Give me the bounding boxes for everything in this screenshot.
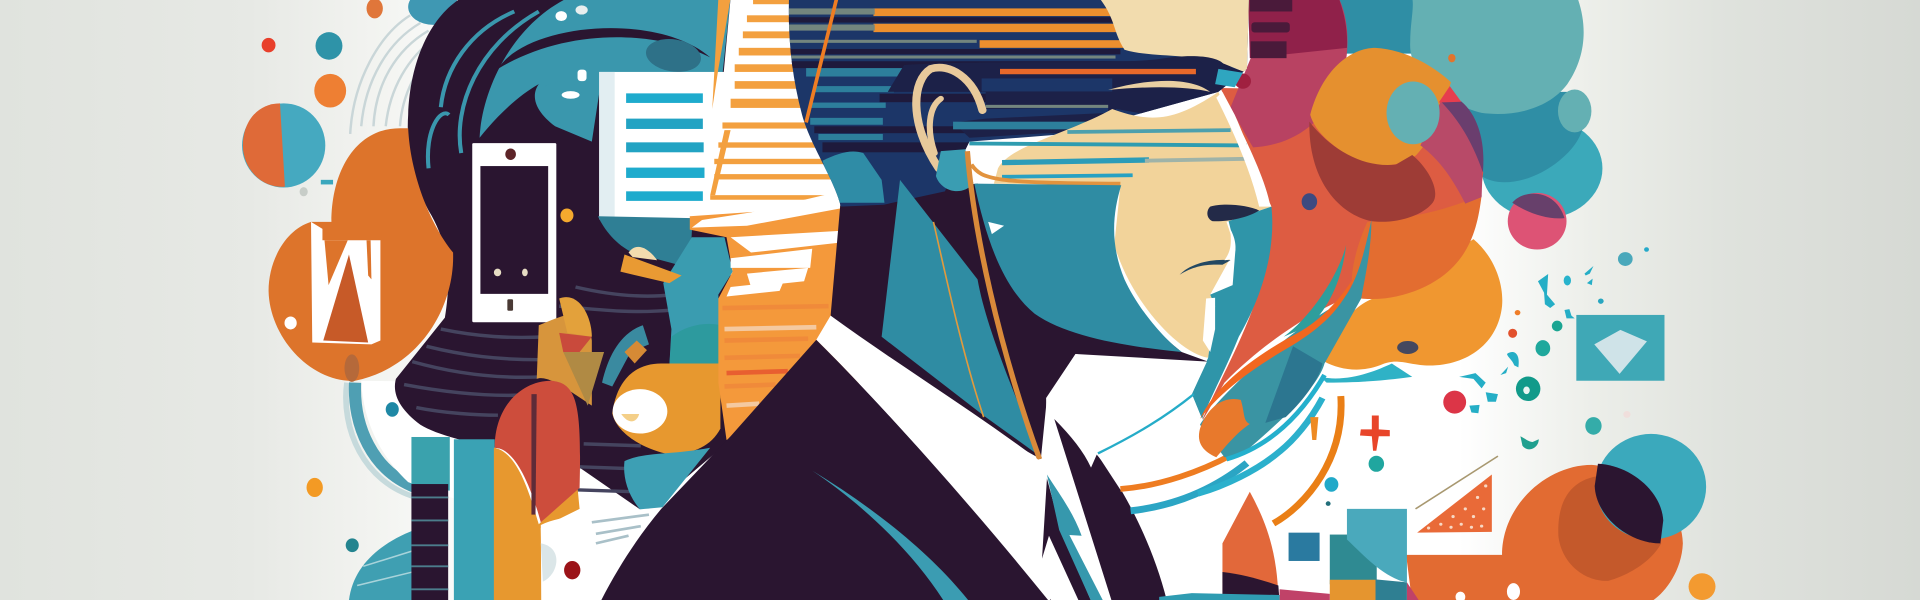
face: nose and chin gleams — [1203, 230, 1236, 352]
dot: crimson by temple — [1235, 73, 1251, 89]
blob: bright orange lower — [1324, 239, 1502, 370]
blob: orange speech with W — [269, 128, 453, 382]
face: eye — [1207, 205, 1259, 221]
head: dark mass — [395, 0, 731, 513]
blob: rose — [1420, 101, 1483, 204]
hair: dark stripes — [782, 17, 1231, 152]
splashes: teal marks — [1459, 266, 1593, 413]
line: olive diagonal — [1416, 456, 1498, 509]
blob: orange mid — [1352, 195, 1482, 299]
face: white highlight — [1216, 92, 1271, 207]
hair: teal temple stripe — [953, 122, 1086, 130]
blob: orange tab — [1199, 399, 1250, 457]
shirt: white below collar — [1098, 417, 1231, 490]
face: mouth — [1180, 260, 1231, 275]
bubble: dark teal top — [1339, 0, 1429, 54]
mark: white notch — [988, 222, 1004, 234]
phone: white device — [472, 143, 556, 322]
dot: amber corner — [1689, 573, 1716, 600]
blob: deep crimson band — [1248, 0, 1347, 58]
suit: dark jacket — [600, 340, 1051, 600]
block: orange base — [1330, 580, 1376, 600]
hair: grey stripes — [789, 8, 1116, 59]
shape: pale shadow — [541, 543, 556, 582]
overlap: purple cap — [1512, 194, 1564, 218]
tie: dark lower piece — [1042, 478, 1092, 600]
mark: orange tick — [1310, 417, 1318, 440]
line: cyan curve — [1227, 375, 1324, 459]
blob: brown red — [1309, 122, 1435, 222]
mark: red bug — [564, 561, 580, 579]
block: pink base — [1280, 589, 1330, 600]
blob: crimson top — [1231, 0, 1348, 147]
drip: orange — [367, 240, 371, 279]
suit: teal lapel sliver — [812, 471, 970, 600]
head: teal stroke arcs — [428, 11, 539, 168]
blob: amber — [1310, 48, 1451, 165]
circle: blue — [1596, 434, 1706, 540]
card: teal square with diamond — [1576, 315, 1664, 381]
flow: dark teal panel — [1265, 346, 1322, 423]
blob: darker orange inner — [1558, 476, 1661, 581]
triangle: rust — [323, 254, 368, 342]
hair: dark swoop brow — [888, 56, 1247, 138]
triangle: red — [1439, 86, 1461, 103]
block: teal bottom edge — [1159, 593, 1280, 600]
circle: pale teal eye — [1387, 82, 1440, 144]
hair: orange stripes — [873, 8, 1127, 48]
hair: teal lower tuft — [822, 152, 884, 203]
dots: white on orange — [1456, 583, 1520, 600]
block: magenta wedge — [1407, 582, 1420, 600]
block: amber column — [494, 448, 580, 600]
flow: cyan arc — [1320, 364, 1412, 383]
line: blue curve — [1131, 463, 1247, 511]
bubble: mid teal — [1461, 92, 1583, 182]
ear: cream loops — [916, 68, 982, 168]
hair: cream top right — [1101, 0, 1249, 72]
backdrop: amber lower field — [690, 205, 861, 440]
wire: thin cord — [933, 222, 984, 417]
line: orange sweep — [1273, 396, 1341, 523]
collage: teal block right — [663, 237, 733, 365]
flow: green streak — [1284, 245, 1346, 337]
hair: orange streak — [1000, 69, 1196, 74]
mark: green tick — [1520, 436, 1539, 449]
backdrop: orange bars — [710, 0, 833, 200]
tie: dark knot and blade — [1054, 419, 1167, 600]
collage: olive and orange flow — [537, 297, 649, 406]
tie: teal sliver — [1047, 474, 1104, 600]
hair: cream brow — [1108, 81, 1210, 92]
shirt: white front — [1046, 354, 1207, 600]
hair: stripe block — [782, 0, 1255, 210]
panel: right foreground shapes — [1159, 220, 1716, 600]
dot: amber near phone — [560, 209, 573, 222]
backdrop: darker orange lines — [722, 306, 829, 406]
dot: white — [284, 316, 297, 329]
letter shape: white W — [311, 222, 380, 344]
blob: red orange hair — [1200, 88, 1483, 425]
neck: teal panel — [882, 180, 1039, 455]
block: teal column — [454, 439, 495, 600]
scraps: white shirt strokes — [541, 507, 665, 600]
circle: orange and teal split — [242, 103, 325, 187]
mark: pipe joint — [344, 354, 359, 382]
blob: large orange lower — [1406, 465, 1683, 600]
line: dark drip — [531, 394, 537, 515]
stripes: dark swirl lines — [404, 287, 673, 492]
line: orange curve — [1120, 455, 1231, 489]
dots: teal and red scatter — [1324, 247, 1649, 506]
collage: cream and orange tags — [620, 247, 682, 283]
pill: red — [495, 381, 580, 522]
block: dark teal base — [1376, 579, 1407, 600]
neck: dark mass — [831, 184, 1208, 459]
ellipse: shadow teal — [643, 35, 704, 76]
bubble: light teal lower — [1482, 118, 1602, 219]
wire: earphone cord — [967, 151, 1040, 459]
collar: white — [816, 316, 1050, 600]
scraps: grey shadow — [592, 515, 649, 543]
bubble: small pale teal — [1558, 90, 1591, 132]
flow: teal fan — [1200, 220, 1371, 457]
circle: pink — [1508, 193, 1567, 249]
blob: purple edge — [1441, 101, 1483, 172]
triangle: orange dotted — [1417, 474, 1492, 533]
line: blue lower curve — [1198, 398, 1322, 494]
panel: right bubbles behind head — [1200, 0, 1602, 425]
collage: teal block upper — [598, 216, 693, 268]
head: dark arc over teal — [498, 28, 710, 69]
white blob under head — [361, 381, 494, 513]
hair: navy base — [782, 0, 1255, 210]
notch: orange gap — [324, 240, 348, 285]
backdrop: white scribbles — [692, 191, 861, 297]
bars: dark on crimson — [1250, 0, 1292, 58]
rocket: orange spire — [1222, 492, 1280, 600]
hair: navy stripe — [982, 78, 1112, 91]
hair: grey eye stripe — [986, 105, 1108, 108]
figure: businessman head and suit — [600, 0, 1272, 600]
line: orange wire across hair — [806, 0, 837, 122]
circle: amber with white moon — [612, 364, 720, 454]
shirt: cyan line collar — [1098, 394, 1194, 453]
tab: cyan temple — [1215, 69, 1243, 87]
bubble: teal top — [408, 0, 459, 25]
block: teal bar — [411, 437, 450, 491]
arc: teal pipe — [355, 383, 416, 488]
flow: orange streak — [1200, 276, 1355, 419]
square: teal light notched — [1347, 509, 1407, 582]
face: teal front shadow — [1192, 207, 1272, 419]
document: white striped panel — [599, 72, 734, 219]
panel: left collage — [242, 0, 734, 600]
leaf: teal bottom — [349, 530, 414, 600]
icon: red plus — [1360, 416, 1390, 451]
square: blue — [1289, 533, 1320, 561]
face: cream — [994, 92, 1271, 358]
eye: teal — [545, 5, 588, 112]
sketch lines: grey arcs — [350, 15, 441, 134]
arc: teal pipe shadow — [346, 383, 416, 497]
ear: teal lobe — [936, 149, 973, 191]
dots: left scatter — [262, 0, 399, 552]
backdrop: white poster — [710, 0, 840, 220]
head: teal swirl top — [480, 0, 731, 142]
dots: on red and amber — [1302, 54, 1456, 354]
face: glasses stripes — [969, 130, 1247, 184]
block: dark ladder — [411, 484, 448, 600]
stripes: orange backdrop behind head — [690, 0, 861, 440]
collage: teal green panel — [669, 324, 720, 365]
block: teal lower — [624, 448, 710, 513]
leaf: dark overlap — [1595, 464, 1663, 543]
bubble: big pale teal — [1410, 0, 1584, 114]
hair: teal stripes — [806, 68, 904, 140]
face: teal mask — [974, 184, 1182, 352]
square: teal dark — [1330, 535, 1377, 584]
